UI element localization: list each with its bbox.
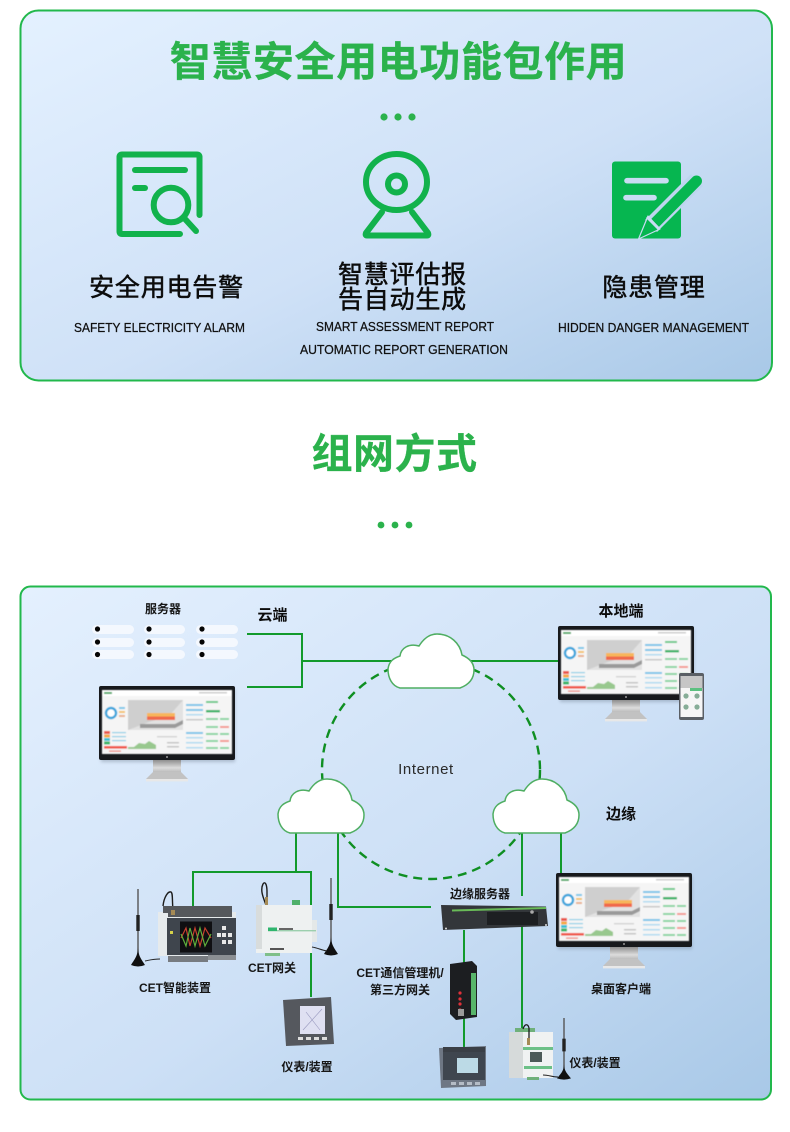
icon: note with pen [612, 162, 697, 239]
heading: networking: 组网方式 [312, 431, 478, 477]
item: hidden danger management: HIDDEN DANGER MANAGEMENT [558, 320, 749, 335]
label: CET gateway: CET网关 [248, 960, 296, 975]
label: internet: Internet [398, 761, 454, 778]
label: meter right: 仪表/装置 [569, 1055, 621, 1070]
device: comm manager [450, 961, 477, 1020]
device: din rail unit [509, 1018, 571, 1080]
device: panel meter [439, 1046, 486, 1088]
cloud: left [278, 779, 364, 833]
cloud: right [493, 779, 579, 833]
three dots under heading [378, 522, 412, 528]
connection lines [193, 634, 561, 1048]
device: edge server [441, 905, 548, 930]
label: local end: 本地端 [598, 603, 644, 620]
item: smart assessment report: AUTOMATIC REPORT GENERATION [300, 342, 508, 357]
label: comm manager: CET通信管理机/ [356, 965, 444, 980]
item: smart assessment report [300, 261, 508, 357]
label: meter left: 仪表/装置 [281, 1059, 333, 1074]
item: smart assessment report: 告自动生成 [338, 286, 467, 314]
monitor: desktop client [556, 873, 692, 968]
item: safety electricity alarm: 安全用电告警 [89, 274, 244, 302]
device: CET gateway [256, 878, 338, 956]
item: safety electricity alarm: SAFETY ELECTRICITY ALARM [74, 320, 245, 335]
label: edge server: 边缘服务器 [450, 886, 510, 901]
device: CET smart device [131, 889, 236, 966]
monitor: local [558, 626, 694, 721]
item: hidden danger management: 隐患管理 [602, 274, 706, 302]
item: smart assessment report: SMART ASSESSMENT REPORT [316, 319, 494, 334]
label: cloud end: 云端 [257, 607, 288, 624]
label: desktop client: 桌面客户端 [591, 981, 651, 996]
title: function pack: 智慧安全用电功能包作用 [170, 39, 627, 85]
server list [92, 625, 238, 659]
label: CET smart device: CET智能装置 [139, 980, 211, 995]
internet dashed ring [322, 661, 540, 879]
label: edge: 边缘 [606, 805, 636, 823]
phone: local [679, 673, 704, 720]
panel: network diagram [20, 586, 771, 1100]
monitor: cloud [99, 686, 235, 781]
icon: document search [120, 154, 200, 234]
cloud: top [388, 634, 474, 688]
item: hidden danger management [558, 274, 749, 335]
item: smart assessment report: 智慧评估报 [338, 261, 467, 289]
label: servers: 服务器 [145, 601, 181, 616]
item: safety electricity alarm [74, 274, 245, 335]
three dots under title [380, 113, 416, 121]
device: meter [283, 997, 334, 1046]
label: comm manager [356, 965, 444, 997]
label: comm manager: 第三方网关 [370, 982, 430, 997]
panel: function pack [20, 10, 772, 380]
icon: webcam [366, 154, 428, 236]
